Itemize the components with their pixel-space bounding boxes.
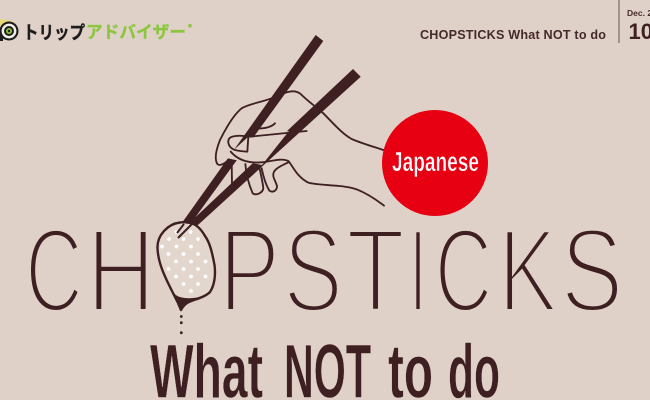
callout: Japanese red circle: [382, 110, 488, 216]
heading: CHOPSTICKS: T: [346, 204, 405, 337]
callout label: Japanese: [392, 146, 479, 177]
spoon drip: [174, 293, 200, 310]
logo: TripAdvisor Japan: [0, 19, 192, 43]
chopstick lower: [178, 69, 361, 240]
illustration: dotted spoon shaped letter O: [157, 222, 215, 310]
logo wordmark black: トリップ: [23, 23, 85, 43]
subheading: What NOT to do: [150, 329, 500, 400]
falling drops: [180, 315, 183, 334]
spoon dots: [160, 230, 207, 293]
heading: CHOPSTICKS: S: [283, 205, 343, 338]
heading: CHOPSTICKS: P: [219, 204, 280, 337]
heading: CHOPSTICKS: [25, 203, 623, 338]
spoon outline: [157, 222, 215, 310]
hand outlines: [216, 91, 384, 206]
heading: CHOPSTICKS: C: [435, 205, 492, 337]
heading: CHOPSTICKS: C: [25, 205, 83, 337]
header title: CHOPSTICKS What NOT to do: [420, 28, 606, 42]
illustration: hand holding chopsticks: [176, 35, 384, 240]
heading: CHOPSTICKS: S: [561, 204, 623, 337]
logo wordmark green: アドバイザー: [86, 23, 186, 42]
icon: owl eye: [0, 19, 18, 41]
logo registered mark: [188, 24, 192, 28]
heading: CHOPSTICKS: H: [87, 203, 155, 337]
hand skin masks over chopsticks: [225, 131, 289, 165]
heading: CHOPSTICKS: K: [498, 205, 558, 338]
heading: CHOPSTICKS: I: [409, 205, 427, 337]
chopstick tips inside spoon: [177, 224, 192, 238]
issue date block: [618, 0, 650, 44]
chopstick upper: [176, 35, 323, 235]
